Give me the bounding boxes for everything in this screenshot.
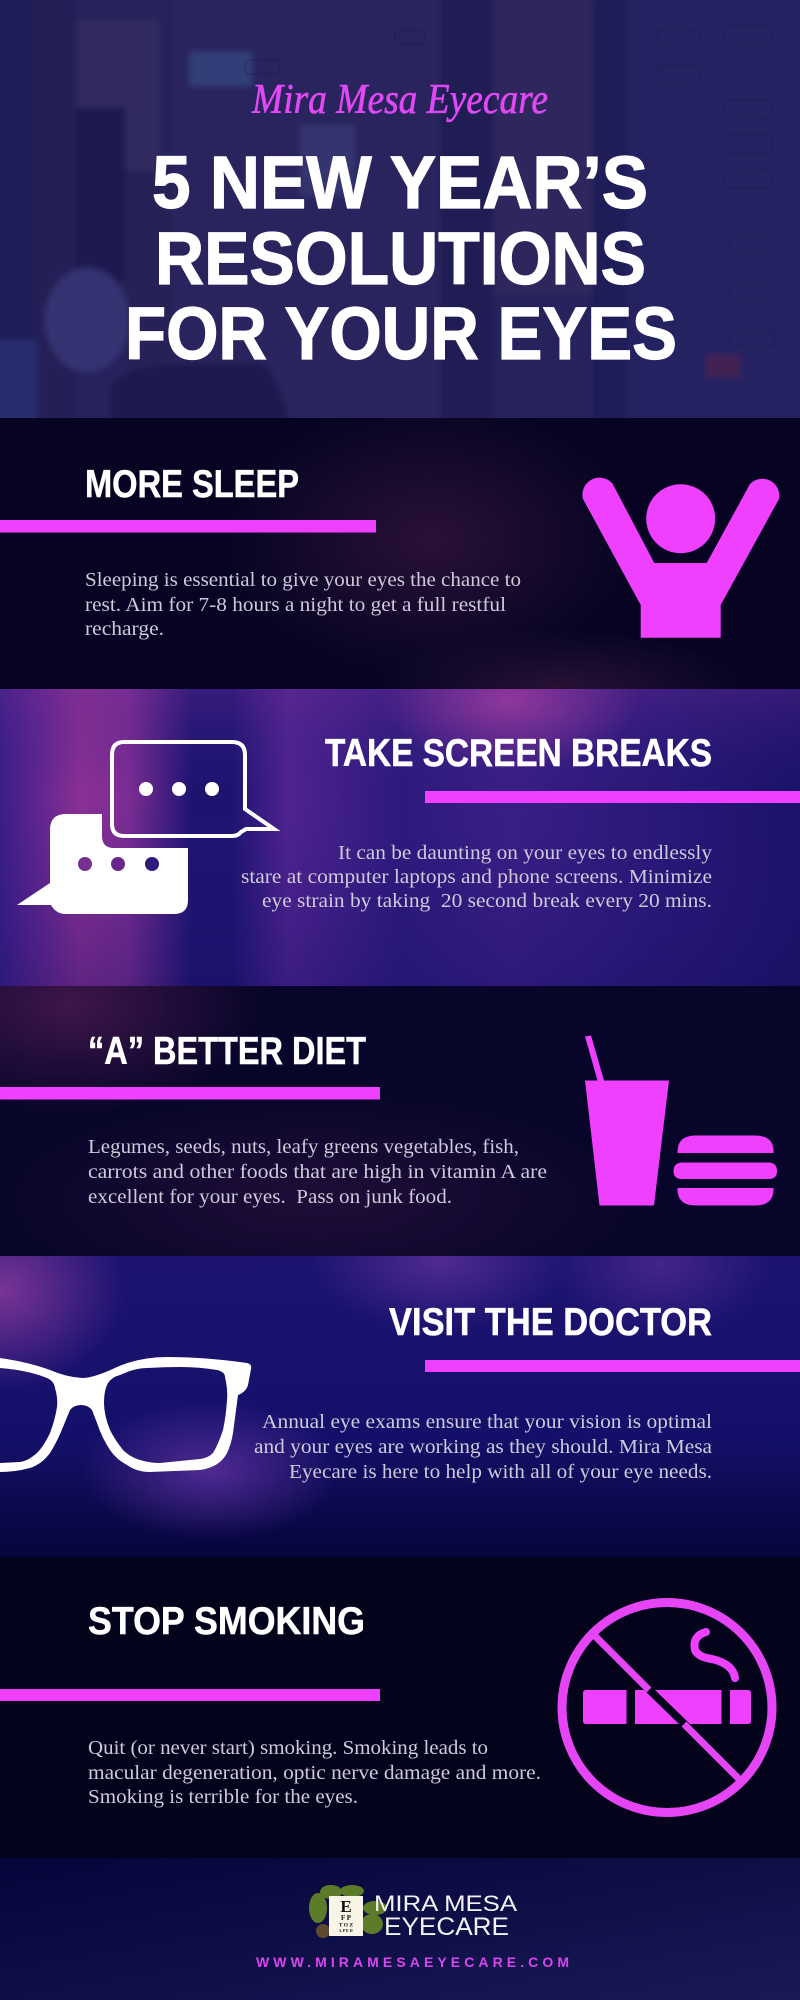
body text: It can be daunting on your eyes to endlessly	[338, 842, 712, 864]
eye chart	[329, 1896, 363, 1936]
cup with straw	[585, 1036, 669, 1206]
body text: macular degeneration, optic nerve damage and more.	[88, 1762, 541, 1784]
icon: no smoking	[562, 1602, 772, 1812]
body text: excellent for your eyes. Pass on junk food.	[88, 1186, 452, 1208]
title: FOR YOUR EYES	[125, 292, 677, 375]
smoke	[694, 1632, 735, 1678]
brand script line: Mira Mesa Eyecare	[251, 77, 548, 123]
panel: stop smoking	[0, 1557, 800, 1858]
body text: stare at computer laptops and phone screens. Minimize	[241, 866, 712, 888]
logo wordmark	[374, 1891, 517, 1941]
body text	[241, 842, 712, 912]
accent bar	[0, 520, 376, 532]
heading: TAKE SCREEN BREAKS	[325, 732, 712, 775]
icon: person arms raised	[582, 478, 779, 638]
filled bubble	[17, 814, 188, 914]
heading: MORE SLEEP	[85, 463, 299, 506]
body text: Eyecare is here to help with all of your eye needs.	[289, 1461, 712, 1483]
body text	[254, 1411, 712, 1483]
title: RESOLUTIONS	[155, 217, 646, 300]
body text: eye strain by taking 20 second break every 20 mins.	[262, 890, 712, 912]
eye chart: F P	[341, 1914, 352, 1922]
logo leaves	[309, 1885, 387, 1934]
body text: Annual eye exams ensure that your vision is optimal	[262, 1411, 712, 1433]
eye chart: T O Z	[339, 1922, 353, 1928]
body text: carrots and other foods that are high in vitamin A are	[88, 1161, 547, 1183]
logo wordmark: EYECARE	[384, 1913, 509, 1941]
cigarette	[583, 1690, 751, 1724]
panel: a better diet	[0, 986, 800, 1256]
heading: STOP SMOKING	[88, 1600, 365, 1643]
body text: Quit (or never start) smoking. Smoking leads to	[88, 1737, 488, 1759]
heading: “A” BETTER DIET	[88, 1030, 366, 1073]
outline bubble dots	[139, 782, 219, 796]
body text	[85, 569, 521, 640]
filled bubble dots	[78, 857, 159, 871]
body text: Legumes, seeds, nuts, leafy greens vegetables, fish,	[88, 1136, 519, 1158]
body text: rest. Aim for 7-8 hours a night to get a full restful	[85, 594, 506, 616]
eye chart: E	[340, 1897, 352, 1916]
outline bubble	[112, 742, 274, 836]
icon: glasses	[0, 1357, 251, 1472]
body text: Smoking is terrible for the eyes.	[88, 1786, 358, 1808]
icon: chat bubbles	[17, 742, 274, 914]
eye chart: L P E D	[339, 1928, 353, 1933]
logo wordmark: MIRA MESA	[374, 1891, 517, 1916]
accent bar	[0, 1689, 380, 1701]
panel: more sleep	[0, 418, 800, 689]
logo	[309, 1885, 517, 1941]
body text: recharge.	[85, 618, 164, 640]
hero background photo	[0, 0, 800, 418]
logo flower	[316, 1924, 330, 1938]
panel: hero	[0, 0, 800, 430]
burger	[674, 1136, 777, 1206]
panel: footer	[0, 1858, 800, 2000]
title: 5 NEW YEAR’S	[152, 141, 648, 224]
body text: Sleeping is essential to give your eyes the chance to	[85, 569, 521, 591]
panel: visit the doctor	[0, 1256, 800, 1557]
accent bar	[425, 1360, 800, 1372]
body text	[88, 1737, 541, 1808]
heading: VISIT THE DOCTOR	[389, 1301, 712, 1344]
title	[125, 141, 677, 375]
body text	[88, 1136, 547, 1208]
website url: WWW.MIRAMESAEYECARE.COM	[256, 1954, 569, 1970]
accent bar	[0, 1087, 380, 1100]
icon: drink and burger	[585, 1036, 777, 1206]
panel: take screen breaks	[0, 689, 800, 986]
body text: and your eyes are working as they should. Mira Mesa	[254, 1436, 712, 1458]
accent bar	[425, 791, 800, 803]
prohibition circle and slash	[562, 1602, 772, 1812]
